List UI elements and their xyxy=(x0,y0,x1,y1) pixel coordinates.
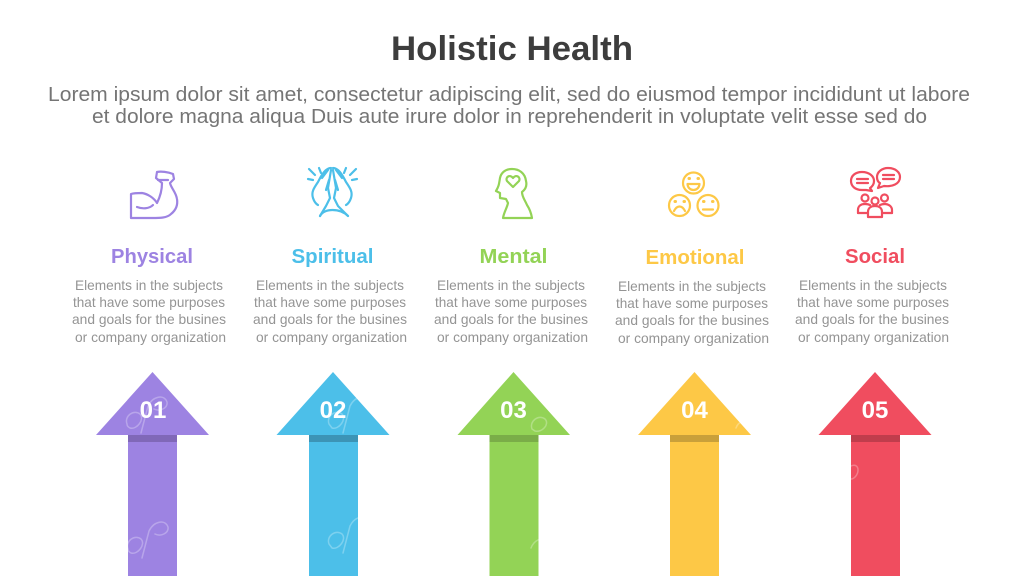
icon: three faces xyxy=(669,172,718,216)
description: spiritual xyxy=(253,277,407,345)
description: spiritual: and goals for the busines xyxy=(253,311,407,327)
description: mental: Elements in the subjects xyxy=(437,277,585,293)
description: mental: that have some purposes xyxy=(435,294,587,310)
arrow: 02: 02 xyxy=(320,397,346,424)
description: social: and goals for the busines xyxy=(795,311,949,327)
heading: social: Social xyxy=(845,246,905,268)
icon: praying hands xyxy=(308,168,357,216)
subtitle xyxy=(48,84,970,128)
title: Holistic Health xyxy=(391,30,633,68)
description: emotional: Elements in the subjects xyxy=(618,278,766,294)
description: physical: or company organization xyxy=(75,329,226,345)
description: physical: Elements in the subjects xyxy=(75,277,223,293)
description: mental: or company organization xyxy=(437,329,588,345)
description: social: that have some purposes xyxy=(797,294,949,310)
arrow: 04 xyxy=(638,372,751,576)
description: mental xyxy=(434,277,588,345)
column: mental xyxy=(434,169,588,576)
column: physical xyxy=(72,172,226,576)
arrow: 01 xyxy=(96,372,209,576)
heading: emotional: Emotional xyxy=(646,247,744,269)
arrow: 05: 05 xyxy=(862,397,888,424)
description: physical: that have some purposes xyxy=(73,294,225,310)
column: emotional xyxy=(615,172,769,576)
icon: head with heart xyxy=(496,169,532,218)
description: emotional: and goals for the busines xyxy=(615,312,769,328)
column: spiritual xyxy=(253,168,407,576)
description: physical xyxy=(72,277,226,345)
description: spiritual: Elements in the subjects xyxy=(256,277,404,293)
arrow: 05 xyxy=(818,372,932,576)
description: mental: and goals for the busines xyxy=(434,311,588,327)
arrow: 04: 04 xyxy=(681,397,708,424)
description: emotional: or company organization xyxy=(618,330,769,346)
arrow: 02 xyxy=(276,372,390,576)
subtitle: Lorem ipsum dolor sit amet, consectetur adipiscing elit, sed do eiusmod tempor incididunt ut labore xyxy=(48,84,970,106)
arrow: 03 xyxy=(458,372,570,576)
description: emotional xyxy=(615,278,769,346)
description: social xyxy=(795,277,949,345)
description: emotional: that have some purposes xyxy=(616,295,768,311)
description: spiritual: or company organization xyxy=(256,329,407,345)
description: social: or company organization xyxy=(798,329,949,345)
heading: mental: Mental xyxy=(480,246,548,268)
subtitle: et dolore magna aliqua Duis aute irure dolor in reprehenderit in voluptate velit esse sed do xyxy=(92,106,927,128)
description: spiritual: that have some purposes xyxy=(254,294,406,310)
arrow: 01: 01 xyxy=(140,397,166,424)
description: physical: and goals for the busines xyxy=(72,311,226,327)
icon: flexed arm xyxy=(131,172,177,218)
column: social xyxy=(795,168,949,576)
heading: spiritual: Spiritual xyxy=(292,246,374,268)
icon: people with speech bubbles xyxy=(851,168,900,217)
heading: physical: Physical xyxy=(111,246,193,268)
description: social: Elements in the subjects xyxy=(799,277,947,293)
arrow: 03: 03 xyxy=(500,397,527,424)
